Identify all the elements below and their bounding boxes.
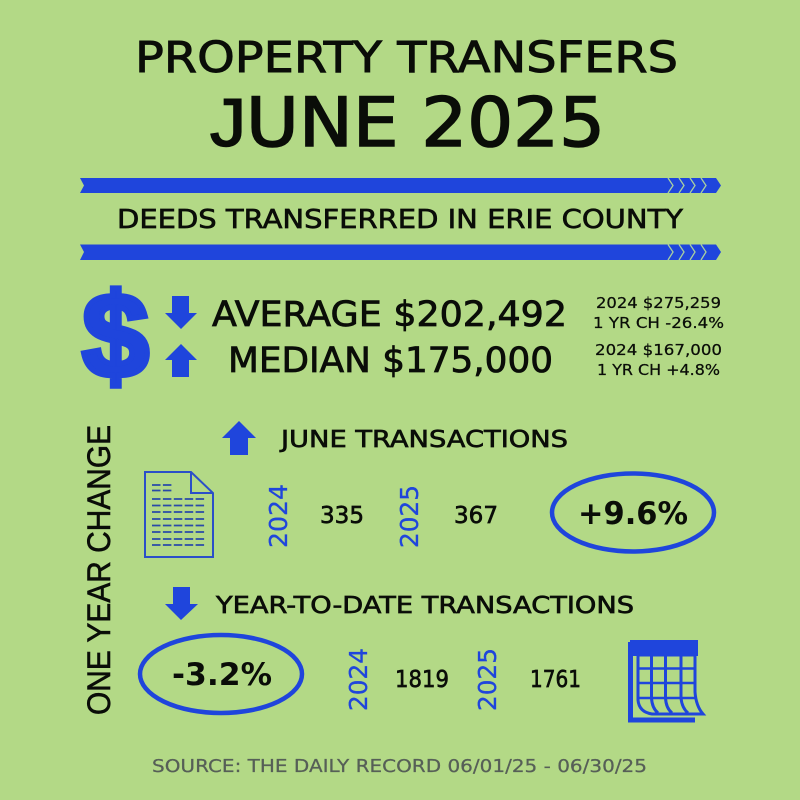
- one year change vertical label: ONE YEAR CHANGE: [81, 425, 117, 715]
- icon: document: [145, 472, 213, 557]
- median comparison: 2024 $167,000: [595, 341, 722, 359]
- callout: june change: [552, 474, 714, 552]
- title: PROPERTY TRANSFERS: [135, 33, 678, 83]
- june transactions heading: JUNE TRANSACTIONS: [279, 427, 568, 453]
- icon: calendar: [630, 640, 703, 720]
- icon: ytd down arrow: [165, 587, 198, 620]
- icon: average down arrow: [165, 296, 197, 329]
- ytd 2024 value: 1819: [395, 667, 449, 693]
- top arrow banner: [80, 178, 721, 193]
- callout: ytd change: [140, 635, 302, 713]
- june 2025 label: 2025: [395, 485, 424, 548]
- source line: SOURCE: THE DAILY RECORD 06/01/25 - 06/30/25: [152, 757, 647, 777]
- median comparison: [595, 341, 722, 379]
- title: JUNE 2025: [210, 84, 605, 163]
- ytd 2024 label: 2024: [344, 648, 373, 711]
- ytd 2025 value: 1761: [530, 667, 581, 693]
- callout: ytd change: -3.2%: [172, 657, 272, 693]
- callout: june change: +9.6%: [578, 496, 688, 532]
- average comparison: 1 YR CH -26.4%: [593, 314, 724, 332]
- june 2024 value: 335: [320, 503, 364, 529]
- subtitle: DEEDS TRANSFERRED IN ERIE COUNTY: [117, 205, 683, 235]
- average comparison: 2024 $275,259: [596, 294, 721, 312]
- median comparison: 1 YR CH +4.8%: [597, 361, 720, 379]
- title: [135, 33, 678, 163]
- average price: AVERAGE $202,492: [212, 295, 567, 335]
- june 2024 label: 2024: [264, 484, 293, 548]
- icon: dollar sign: $: [82, 269, 149, 403]
- average comparison: [593, 294, 724, 332]
- year-to-date heading: YEAR-TO-DATE TRANSACTIONS: [215, 593, 634, 619]
- ytd 2025 label: 2025: [473, 648, 502, 711]
- median price: MEDIAN $175,000: [228, 341, 553, 381]
- icon: median up arrow: [165, 344, 197, 377]
- icon: june up arrow: [222, 421, 256, 455]
- bottom arrow banner: [80, 244, 721, 260]
- june 2025 value: 367: [454, 503, 498, 529]
